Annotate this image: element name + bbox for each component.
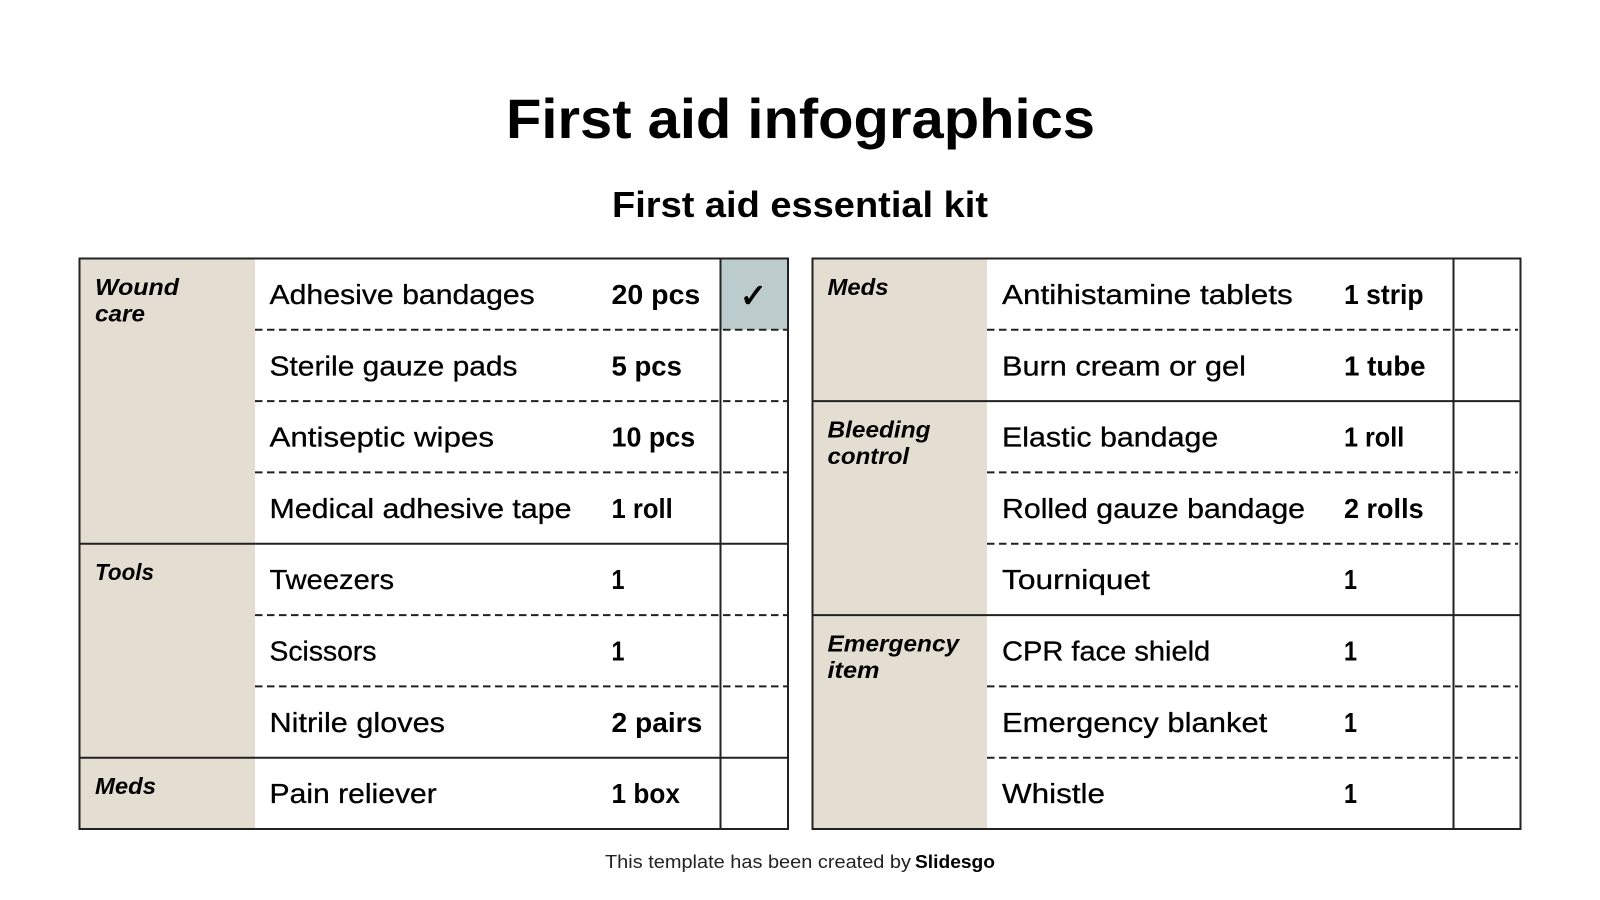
item rows: left: Sterile gauze pads xyxy=(270,350,518,381)
category label: Emergency item: Emergency xyxy=(828,630,960,656)
category label: Bleeding control: Bleeding xyxy=(828,416,930,442)
item rows: right: 1 xyxy=(1344,778,1357,809)
item rows: left: 5 pcs xyxy=(612,350,682,381)
item rows: left: 1 xyxy=(612,635,624,666)
item rows: left: Pain reliever xyxy=(270,778,437,809)
item rows: left: 1 box xyxy=(612,778,680,809)
item rows: left: Scissors xyxy=(270,636,376,666)
item rows: left xyxy=(270,279,702,809)
item rows: right: Emergency blanket xyxy=(1002,707,1268,738)
item rows: right: 1 xyxy=(1344,707,1357,738)
item rows: right: 1 xyxy=(1344,564,1357,595)
category column background: right table xyxy=(812,258,987,829)
item rows: right: CPR face shield xyxy=(1002,636,1210,666)
category label: Wound care: Wound xyxy=(95,274,180,300)
item rows: right: Burn cream or gel xyxy=(1002,350,1246,381)
item rows: right xyxy=(1002,279,1426,809)
category label: Meds: Meds xyxy=(95,773,156,799)
footer credit: This template has been created by xyxy=(605,852,911,872)
item rows: left: 1 xyxy=(612,564,624,595)
item rows: left: 20 pcs xyxy=(612,279,700,310)
item rows: left: 2 pairs xyxy=(612,707,702,738)
item rows: right: 1 strip xyxy=(1344,279,1424,310)
item rows: right: 1 xyxy=(1344,635,1357,666)
checked cell highlight xyxy=(720,258,788,330)
category label: Wound care: care xyxy=(95,300,145,326)
item rows: right: 1 tube xyxy=(1344,350,1426,381)
item rows: left: Antiseptic wipes xyxy=(270,422,494,453)
item rows: left: Tweezers xyxy=(270,564,394,595)
category label: Emergency item: item xyxy=(828,657,880,683)
category label: Bleeding control: control xyxy=(828,443,910,469)
category column background: left table xyxy=(80,258,255,829)
item rows: right: Whistle xyxy=(1002,778,1105,809)
subtitle: First aid essential kit xyxy=(612,184,988,225)
item rows: right: 1 roll xyxy=(1344,422,1404,453)
footer credit: Slidesgo xyxy=(915,852,995,872)
item rows: right: Rolled gauze bandage xyxy=(1002,493,1305,524)
panel: left checklist table xyxy=(80,258,788,829)
table grid: left xyxy=(80,258,788,829)
category label: Tools: Tools xyxy=(95,559,154,585)
item rows: left: Adhesive bandages xyxy=(270,279,535,310)
item rows: right: 2 rolls xyxy=(1344,493,1424,524)
item rows: left: Medical adhesive tape xyxy=(270,493,572,524)
item rows: right: Antihistamine tablets xyxy=(1002,279,1293,310)
panel: right checklist table xyxy=(812,258,1520,829)
category label: Meds: Meds xyxy=(828,274,888,300)
item rows: left: Nitrile gloves xyxy=(270,707,445,738)
title: First aid infographics xyxy=(506,87,1095,150)
item rows: left: 10 pcs xyxy=(612,422,695,453)
item rows: left: 1 roll xyxy=(612,493,673,524)
item rows: right: Tourniquet xyxy=(1002,564,1150,595)
table grid: right xyxy=(812,258,1520,829)
item rows: right: Elastic bandage xyxy=(1002,422,1218,453)
icon: check mark: ✓ xyxy=(740,276,767,315)
